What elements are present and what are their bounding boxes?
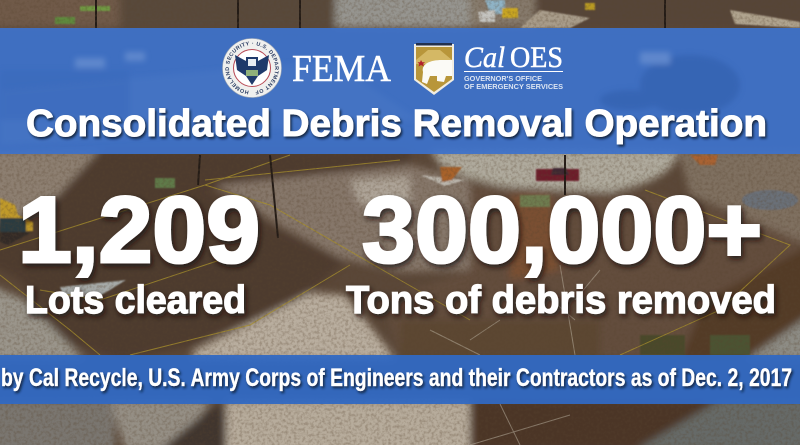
right-hand cleared lots xyxy=(385,185,800,360)
Cal OES wordmark: OES xyxy=(510,41,563,74)
Cal OES wordmark xyxy=(464,41,563,91)
top blue banner xyxy=(0,28,800,154)
stat label: lots cleared: Lots cleared xyxy=(25,279,246,322)
stat label: tons of debris removed: Tons of debris removed xyxy=(346,279,776,322)
Cal OES wordmark: GOVERNOR'S OFFICE xyxy=(464,74,542,83)
bottom blue banner xyxy=(0,355,800,404)
FEMA wordmark: FEMA xyxy=(292,48,392,90)
yellow caution tape lines xyxy=(0,155,790,355)
roadway and lot details xyxy=(0,0,800,355)
sidewalk lower-left xyxy=(0,285,85,360)
Cal OES wordmark: OF EMERGENCY SERVICES xyxy=(464,82,563,91)
tan cleared lot xyxy=(215,165,470,272)
title: Consolidated Debris Removal Operation xyxy=(26,103,767,145)
stat: lots cleared number: 1,209 xyxy=(18,177,260,282)
bottom strip xyxy=(0,400,115,445)
top strip xyxy=(0,0,120,28)
excavator xyxy=(0,198,33,232)
work equipment xyxy=(485,0,505,14)
ghosted photo detail in top banner xyxy=(0,52,740,145)
burned trees xyxy=(96,0,665,238)
pale debris pile, lower centre xyxy=(190,293,395,360)
dark strip and main cleared lot xyxy=(0,150,410,360)
stat: tons of debris number: 300,000+ xyxy=(362,177,762,282)
seal ring text xyxy=(229,45,275,91)
icon: Cal OES shield xyxy=(414,43,454,95)
Cal OES wordmark: Cal xyxy=(464,41,505,74)
icon: DHS seal: HOMELAND SECURITY · U.S. DEPARTMENT OF xyxy=(225,42,279,94)
upper-left debris field xyxy=(0,150,125,225)
circular paved court xyxy=(430,150,678,192)
red pickup truck xyxy=(536,169,579,181)
